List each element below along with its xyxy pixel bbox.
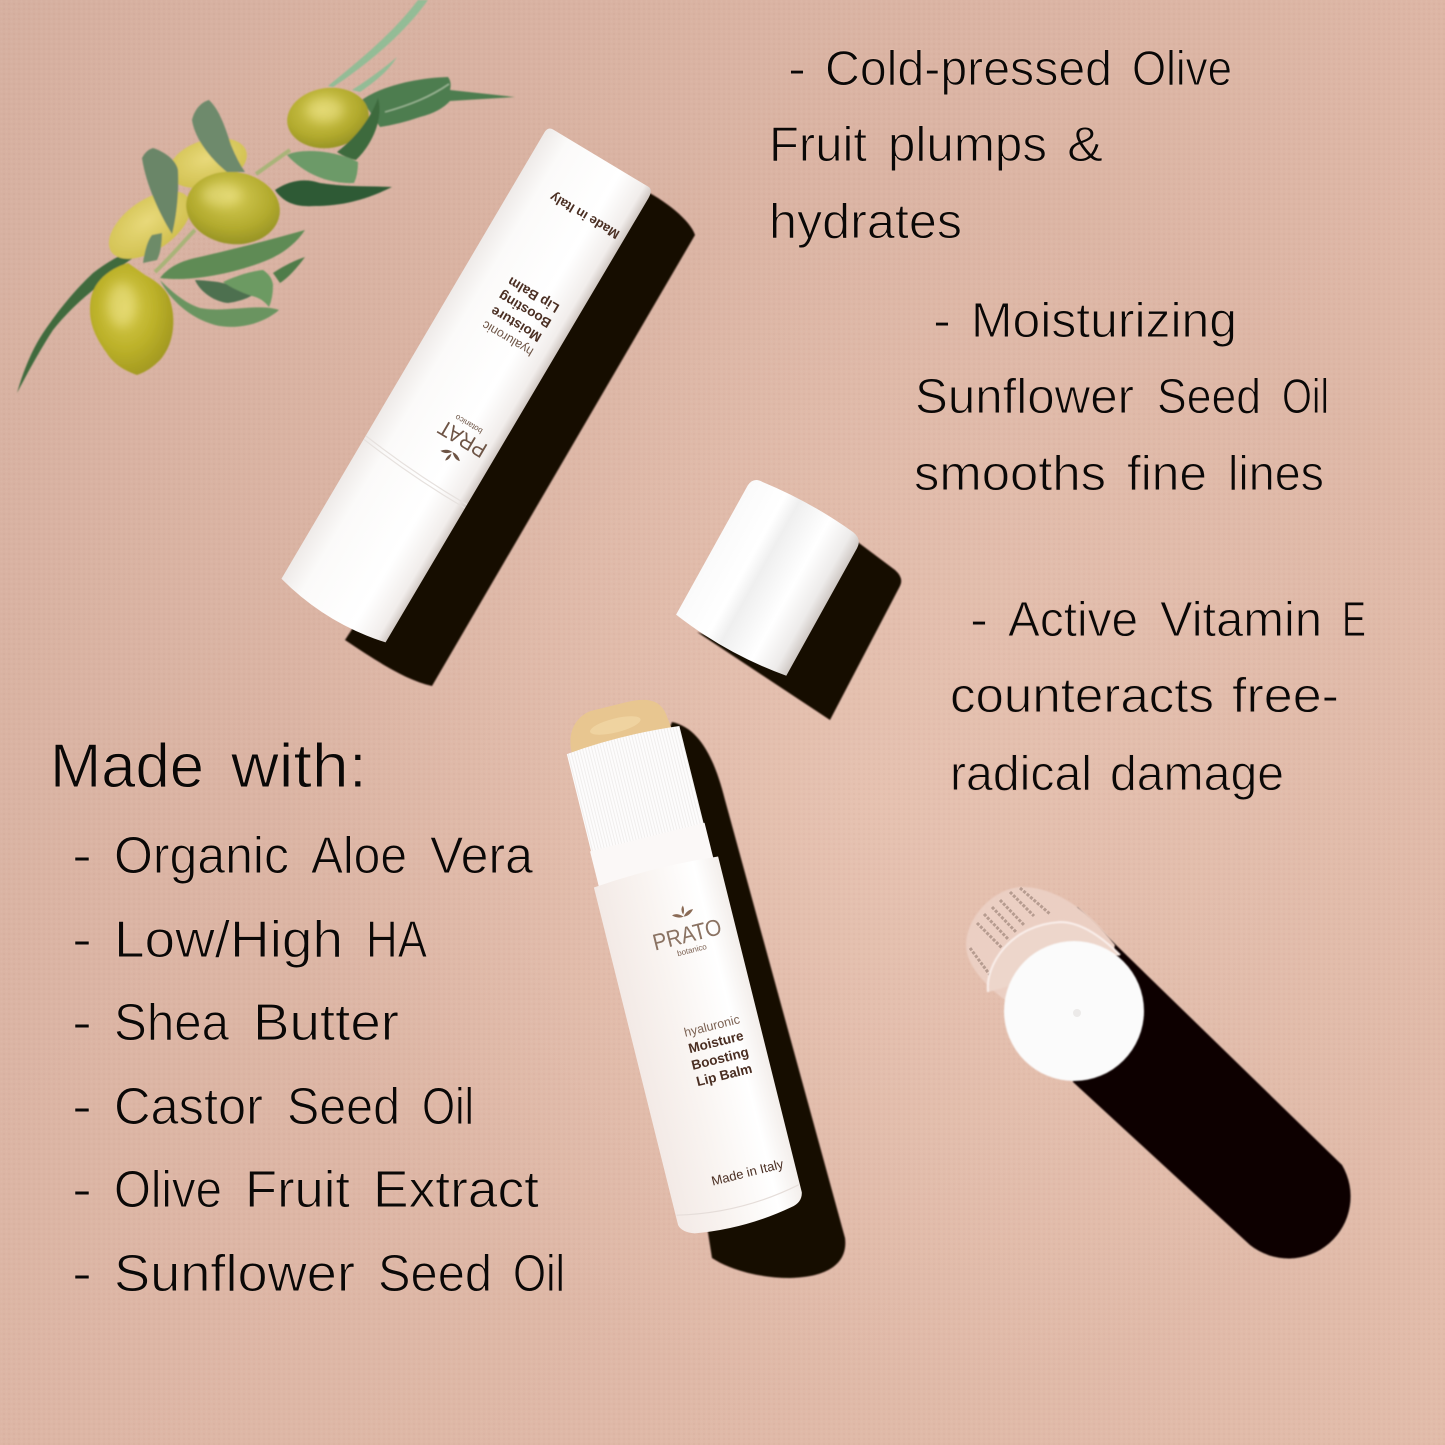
label [645, 897, 785, 1189]
callout: sunflower seed oil: lines [1228, 447, 1324, 501]
ingredient list: - [72, 994, 92, 1052]
ingredient list: - [72, 1245, 92, 1303]
product name: Boosting [496, 288, 554, 331]
callout: cold-pressed olive fruit: Olive [1132, 42, 1232, 96]
product name: Lip Balm [505, 274, 562, 316]
product name: Lip Balm [695, 1061, 754, 1089]
leaf: long green [160, 230, 305, 279]
product name [682, 1012, 754, 1089]
collar ring [988, 922, 1120, 992]
ingredient list: - [72, 1078, 92, 1136]
tube side [966, 887, 1115, 1030]
white end cap [1004, 941, 1144, 1081]
logo: PRAT [434, 415, 491, 463]
tube body [277, 126, 654, 649]
leaf: grey left [142, 148, 178, 234]
ingredient list: - [72, 827, 92, 885]
loose white cap [674, 474, 864, 680]
fine print [970, 888, 1050, 975]
base line [677, 1185, 801, 1222]
callout: sunflower seed oil: Sunflower [915, 370, 1134, 424]
callout: vitamin E: E [1342, 593, 1366, 647]
product name: Moisture [687, 1028, 745, 1056]
shadow: upright tube [1073, 907, 1351, 1258]
leaf: mid back light [223, 270, 273, 307]
ingredient list: Fruit [245, 1161, 351, 1219]
leaf: small tip [273, 257, 305, 283]
product name: Moisture [488, 303, 544, 345]
callout: vitamin E: - [970, 593, 988, 647]
callout: sunflower seed oil: Seed [1157, 370, 1261, 424]
leaf: mid back dark [195, 280, 253, 303]
ingredient list: Extract [373, 1161, 540, 1219]
product name: Boosting [690, 1044, 750, 1073]
ingredient list: Shea [114, 994, 229, 1052]
leaf: far right [362, 77, 515, 127]
callout: sunflower seed oil: smooths [914, 447, 1106, 501]
callout: sunflower seed oil [914, 294, 1329, 501]
callout: vitamin E: free- [1232, 669, 1339, 723]
seam line [360, 436, 471, 508]
callout: cold-pressed olive fruit: Fruit [769, 118, 867, 172]
olive highlights [108, 98, 343, 327]
product name [479, 274, 562, 359]
leaf: dark horizontal [275, 180, 392, 206]
ingredient list: - [72, 911, 92, 969]
leaf: long lower left [17, 247, 143, 393]
product name: hyaluronic [683, 1012, 741, 1040]
logo sprout [670, 903, 694, 919]
callout: cold-pressed olive fruit: plumps [888, 118, 1047, 172]
ingredient list: Oil [513, 1245, 565, 1303]
shadow: centre tube [640, 722, 845, 1278]
heading: made with: Made [50, 732, 204, 801]
callout: sunflower seed oil: fine [1127, 447, 1207, 501]
callout: sunflower seed oil: Oil [1282, 370, 1329, 424]
stem: top sprig [328, 0, 428, 92]
botanico: botanico [453, 412, 484, 436]
callout: vitamin E: damage [1110, 747, 1284, 801]
ribbed collar [566, 723, 705, 855]
heading: made with: with: [230, 732, 367, 801]
ingredient list: Oil [422, 1078, 474, 1136]
callout: vitamin E: counteracts [950, 669, 1214, 723]
midrib: far right leaf [385, 84, 449, 112]
opened lip balm [552, 690, 806, 1240]
callout: cold-pressed olive fruit [769, 42, 1232, 249]
callout: cold-pressed olive fruit: & [1067, 118, 1103, 172]
callout: cold-pressed olive fruit: hydrates [769, 195, 962, 249]
callout: sunflower seed oil: Moisturizing [971, 294, 1237, 348]
olive: bottom [90, 263, 173, 375]
leaf: bottom [160, 280, 279, 327]
ingredient list: Low/High [114, 911, 343, 969]
leaf: small stub [143, 233, 162, 263]
callout: vitamin E: Vitamin [1160, 593, 1322, 647]
shadow: upper tube [345, 188, 695, 686]
olive: elongated left [97, 178, 203, 272]
ingredient list: - [72, 1161, 92, 1219]
product name: hyaluronic [480, 318, 536, 359]
ingredient list: Organic [114, 827, 289, 885]
upside-down label [407, 189, 622, 478]
logo sprout [437, 446, 462, 467]
ingredient list: HA [366, 911, 427, 969]
olive: centre [181, 166, 285, 250]
cap body [674, 474, 864, 680]
ingredient list: Seed [378, 1245, 492, 1303]
callout: vitamin E: Active [1008, 593, 1138, 647]
balm bullet [563, 693, 672, 755]
olive: top [283, 83, 373, 153]
cap centre dimple [1073, 1009, 1081, 1017]
ingredient list: Sunflower [114, 1245, 355, 1303]
leaf: grey upper [192, 100, 245, 172]
callout: vitamin E: radical [950, 747, 1092, 801]
callout: sunflower seed oil: - [933, 294, 951, 348]
made in italy: Made in Italy [710, 1156, 785, 1189]
leaf: pale mid [287, 151, 358, 183]
callout: vitamin E [950, 593, 1366, 801]
leaf: small dark near top olive [337, 98, 380, 160]
ingredient list: Aloe [311, 827, 407, 885]
balm highlight [588, 712, 642, 739]
ingredient list: Seed [287, 1078, 400, 1136]
ingredient list [72, 827, 565, 1303]
ingredient list: Vera [430, 827, 533, 885]
ingredient list: Olive [114, 1161, 222, 1219]
callout: cold-pressed olive fruit: - [788, 42, 806, 96]
neck [590, 823, 714, 888]
upright lip balm seen from above [966, 887, 1144, 1081]
botanico: botanico [676, 942, 708, 958]
logo: PRATO [650, 913, 724, 955]
olive: upper back [163, 129, 253, 197]
body [593, 854, 806, 1240]
olive branch [17, 0, 515, 393]
upper lip balm tube [277, 126, 654, 649]
callout: cold-pressed olive fruit: Cold-pressed [825, 42, 1112, 96]
stem: twigs [155, 150, 290, 272]
ingredient list: Castor [114, 1078, 263, 1136]
ingredient list: Butter [253, 994, 399, 1052]
made in italy: Made in Italy [547, 189, 622, 242]
shadow: loose cap [697, 540, 901, 720]
